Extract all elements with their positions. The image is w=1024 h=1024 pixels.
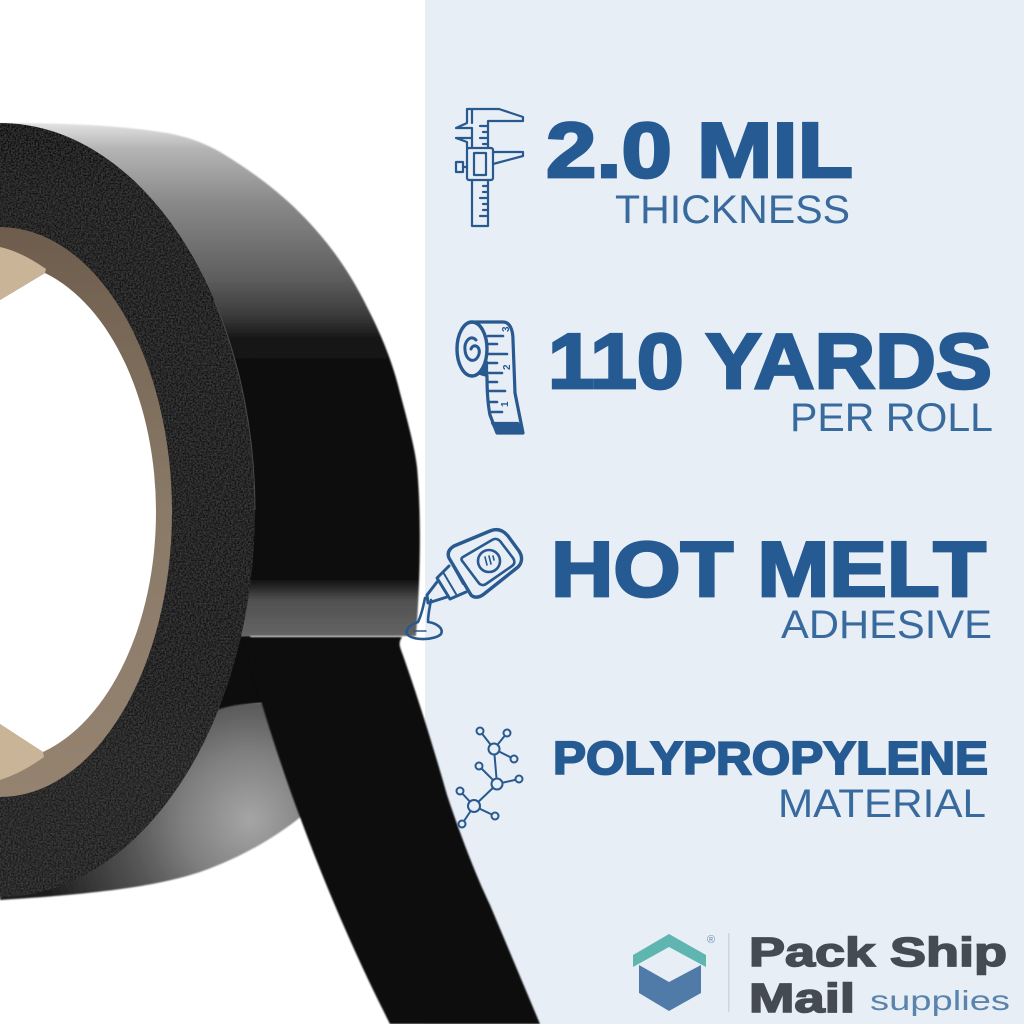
tape outer side lower — [0, 703, 303, 900]
label: per roll: PER ROLL — [790, 396, 993, 440]
tape shadow band under roll — [200, 636, 265, 722]
spec: polypropylene material — [456, 728, 988, 828]
spec: yards per roll — [457, 317, 993, 440]
label: adhesive: ADHESIVE — [781, 603, 992, 647]
icon: box roof — [633, 934, 706, 967]
text: tape digits — [500, 326, 513, 407]
logo divider — [728, 933, 730, 1012]
tape face edge highlight — [214, 300, 255, 510]
tape roll photo — [0, 123, 540, 1024]
text: tape digits: 3 — [501, 326, 512, 332]
icon: caliper — [456, 109, 523, 226]
tape outer side upper — [0, 123, 420, 636]
wordmark: Pack Ship: Pack Ship — [749, 929, 1007, 975]
cardboard core upper — [0, 247, 46, 300]
heading: 2.0 MIL: 2.0 MIL — [546, 106, 853, 194]
icon: measuring tape — [457, 322, 523, 433]
heading: HOT MELT: HOT MELT — [551, 525, 986, 613]
cardboard core lower — [0, 724, 44, 780]
tape loose tail — [243, 637, 540, 1024]
cardboard core ring — [0, 227, 172, 797]
text: tape digits: 1 — [500, 401, 511, 407]
spec: thickness — [456, 106, 853, 232]
tape face — [0, 123, 255, 897]
logo: Pack Ship Mail supplies — [633, 929, 1010, 1021]
heading: polypropylene: POLYPROPYLENE — [553, 732, 988, 784]
registered mark: ® — [707, 934, 715, 946]
roll hole — [0, 273, 156, 752]
heading: 110 YARDS: 110 YARDS — [548, 317, 992, 405]
icon: box body — [639, 965, 701, 1011]
text: tape digits: 2 — [502, 364, 513, 370]
panel: specifications background — [425, 0, 1024, 1024]
spec: hot melt adhesive — [407, 525, 992, 647]
label: thickness: THICKNESS — [615, 188, 850, 232]
icon: molecule — [456, 728, 522, 828]
wordmark: supplies: supplies — [870, 985, 1010, 1016]
wordmark: Mail: Mail — [749, 975, 855, 1021]
icon: glue bottle — [407, 530, 522, 639]
label: material: MATERIAL — [778, 782, 986, 826]
